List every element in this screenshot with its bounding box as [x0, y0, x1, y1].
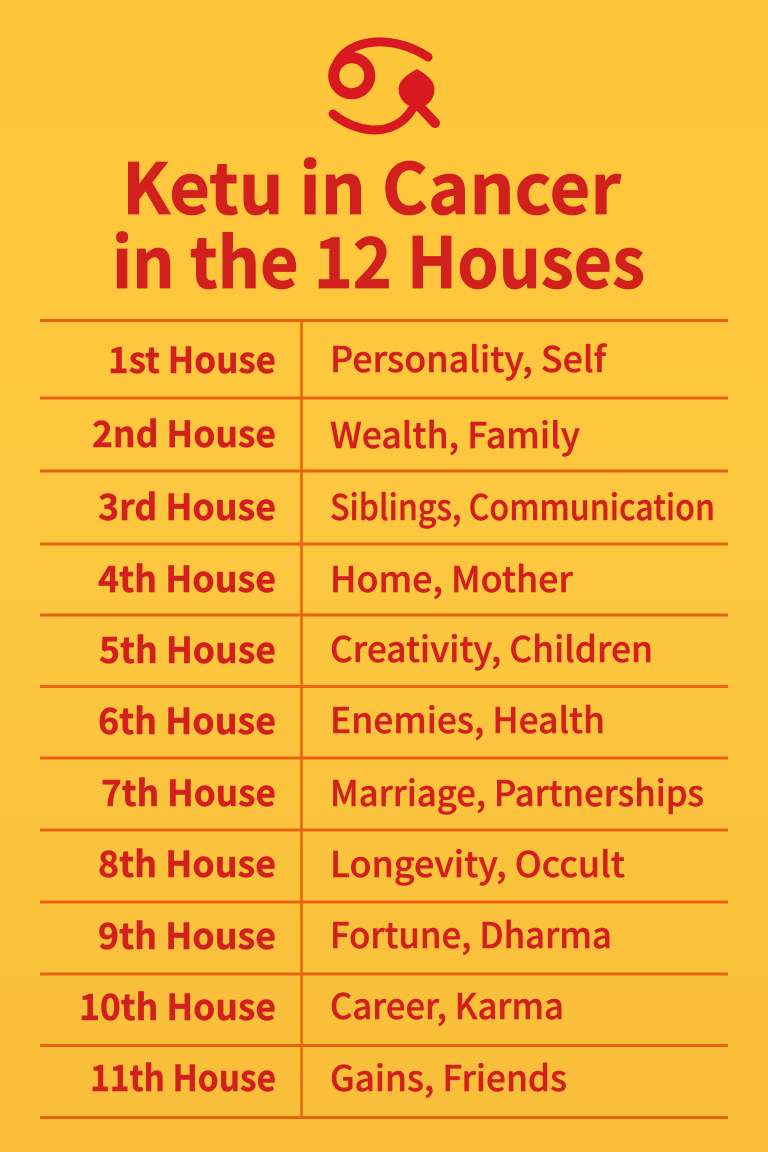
- row: 9th house: [98, 908, 612, 960]
- row: 8th house: 8th House: [98, 836, 276, 888]
- row: 9th house: 9th House: [98, 908, 276, 960]
- row: 5th house: Creativity, Children: [330, 622, 653, 673]
- row: 7th house: 7th House: [101, 765, 276, 817]
- row: 5th house: [99, 622, 653, 674]
- title: in the 12 Houses: [112, 208, 645, 309]
- row: 6th house: [98, 693, 605, 745]
- row: 4th house: [98, 551, 574, 603]
- row: 8th house: [98, 836, 625, 888]
- row: 1st house: [108, 332, 608, 384]
- row: 7th house: [101, 765, 704, 817]
- row: 8th house: Longevity, Occult: [330, 837, 625, 888]
- title: Ketu in Cancer: [122, 134, 621, 235]
- row: 9th house: Fortune, Dharma: [330, 908, 612, 959]
- table grid lines: [40, 320, 728, 1118]
- row: 6th house: Enemies, Health: [330, 693, 605, 744]
- row: 3rd house: Siblings, Communication: [330, 480, 715, 531]
- row: 6th house: 6th House: [98, 693, 276, 745]
- row: 2nd house: Wealth, Family: [330, 408, 580, 459]
- row: 4th house: 4th House: [98, 551, 276, 603]
- row: 3rd house: 3rd House: [98, 479, 276, 531]
- row: 7th house: Marriage, Partnerships: [330, 766, 704, 817]
- row: 5th house: 5th House: [99, 622, 276, 674]
- table of houses: [40, 320, 728, 1118]
- row: 4th house: Home, Mother: [330, 552, 574, 603]
- icon: cancer zodiac glyph: [333, 42, 435, 130]
- row: 1st house: 1st House: [108, 332, 276, 384]
- row: 10th house: Career, Karma: [330, 979, 564, 1030]
- row: 11th house: 11th House: [90, 1050, 276, 1102]
- title: [112, 134, 645, 309]
- row: 2nd house: [92, 406, 580, 459]
- row: 2nd house: 2nd House: [92, 406, 276, 458]
- row: 3rd house: [98, 479, 715, 531]
- row: 1st house: Personality, Self: [330, 332, 608, 383]
- row: 10th house: 10th House: [79, 979, 276, 1031]
- row: 11th house: [90, 1050, 567, 1102]
- row: 10th house: [79, 979, 564, 1031]
- row: 11th house: Gains, Friends: [330, 1051, 567, 1102]
